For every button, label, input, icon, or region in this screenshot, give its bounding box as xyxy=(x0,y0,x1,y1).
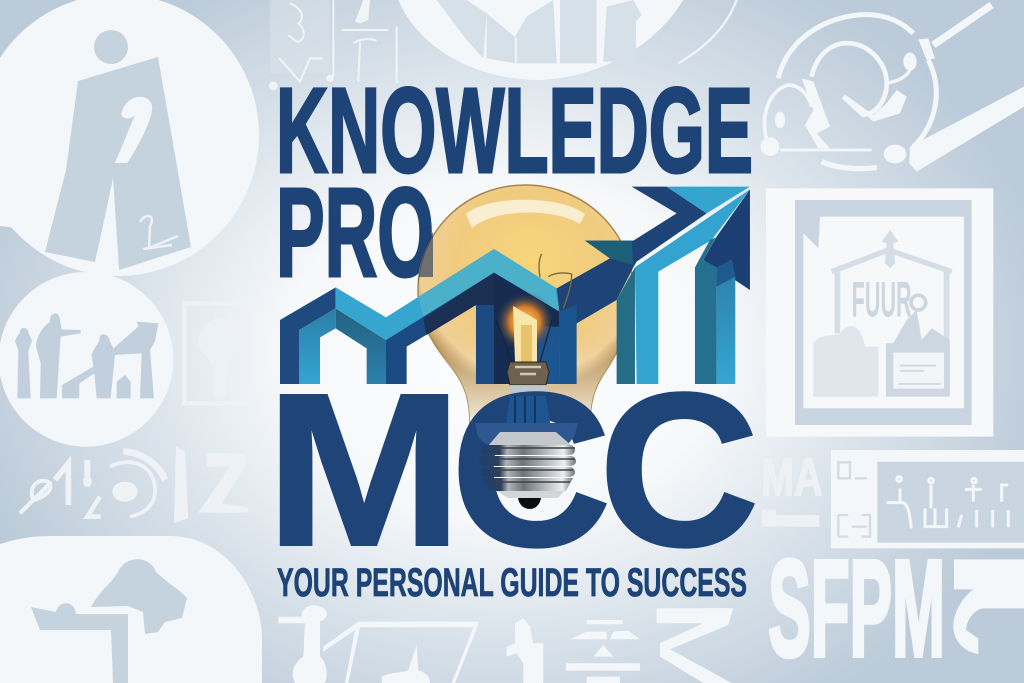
heading: MCC: C xyxy=(599,349,759,592)
icon: bulb stem and screw base xyxy=(475,396,578,509)
icon: framed shop poster xyxy=(766,188,993,437)
icon cluster: top centre notes and circle emblem xyxy=(269,0,737,90)
heading: MCC xyxy=(265,349,759,592)
icon: gauge with magnifier and headset xyxy=(761,5,1024,172)
heading: PRO: PRO xyxy=(276,162,434,303)
icon: person with question mark in circle xyxy=(0,0,259,276)
icon cluster: bottom centre pictograms xyxy=(278,605,733,683)
icon panel: MA label and pictogram strip xyxy=(761,449,1024,683)
icon: framed silhouette xyxy=(184,303,249,403)
icon: glowing filament xyxy=(495,292,555,400)
icon: light bulb glass xyxy=(418,185,633,425)
MA lettering: MA xyxy=(761,449,823,508)
chart: rising arrow xyxy=(280,187,750,384)
icon row: numerals and gauge marks xyxy=(20,447,248,523)
icon: signpost and animal in rounded panel xyxy=(0,536,262,683)
icon: framed shop poster: FUUR xyxy=(852,272,912,328)
tagline: YOUR PERSONAL GUIDE TO SUCCESS xyxy=(277,561,747,605)
heading: MCC: M xyxy=(265,349,463,592)
heading: MCC: C xyxy=(451,349,611,592)
icon: figures climbing a chart in circle xyxy=(0,272,173,447)
